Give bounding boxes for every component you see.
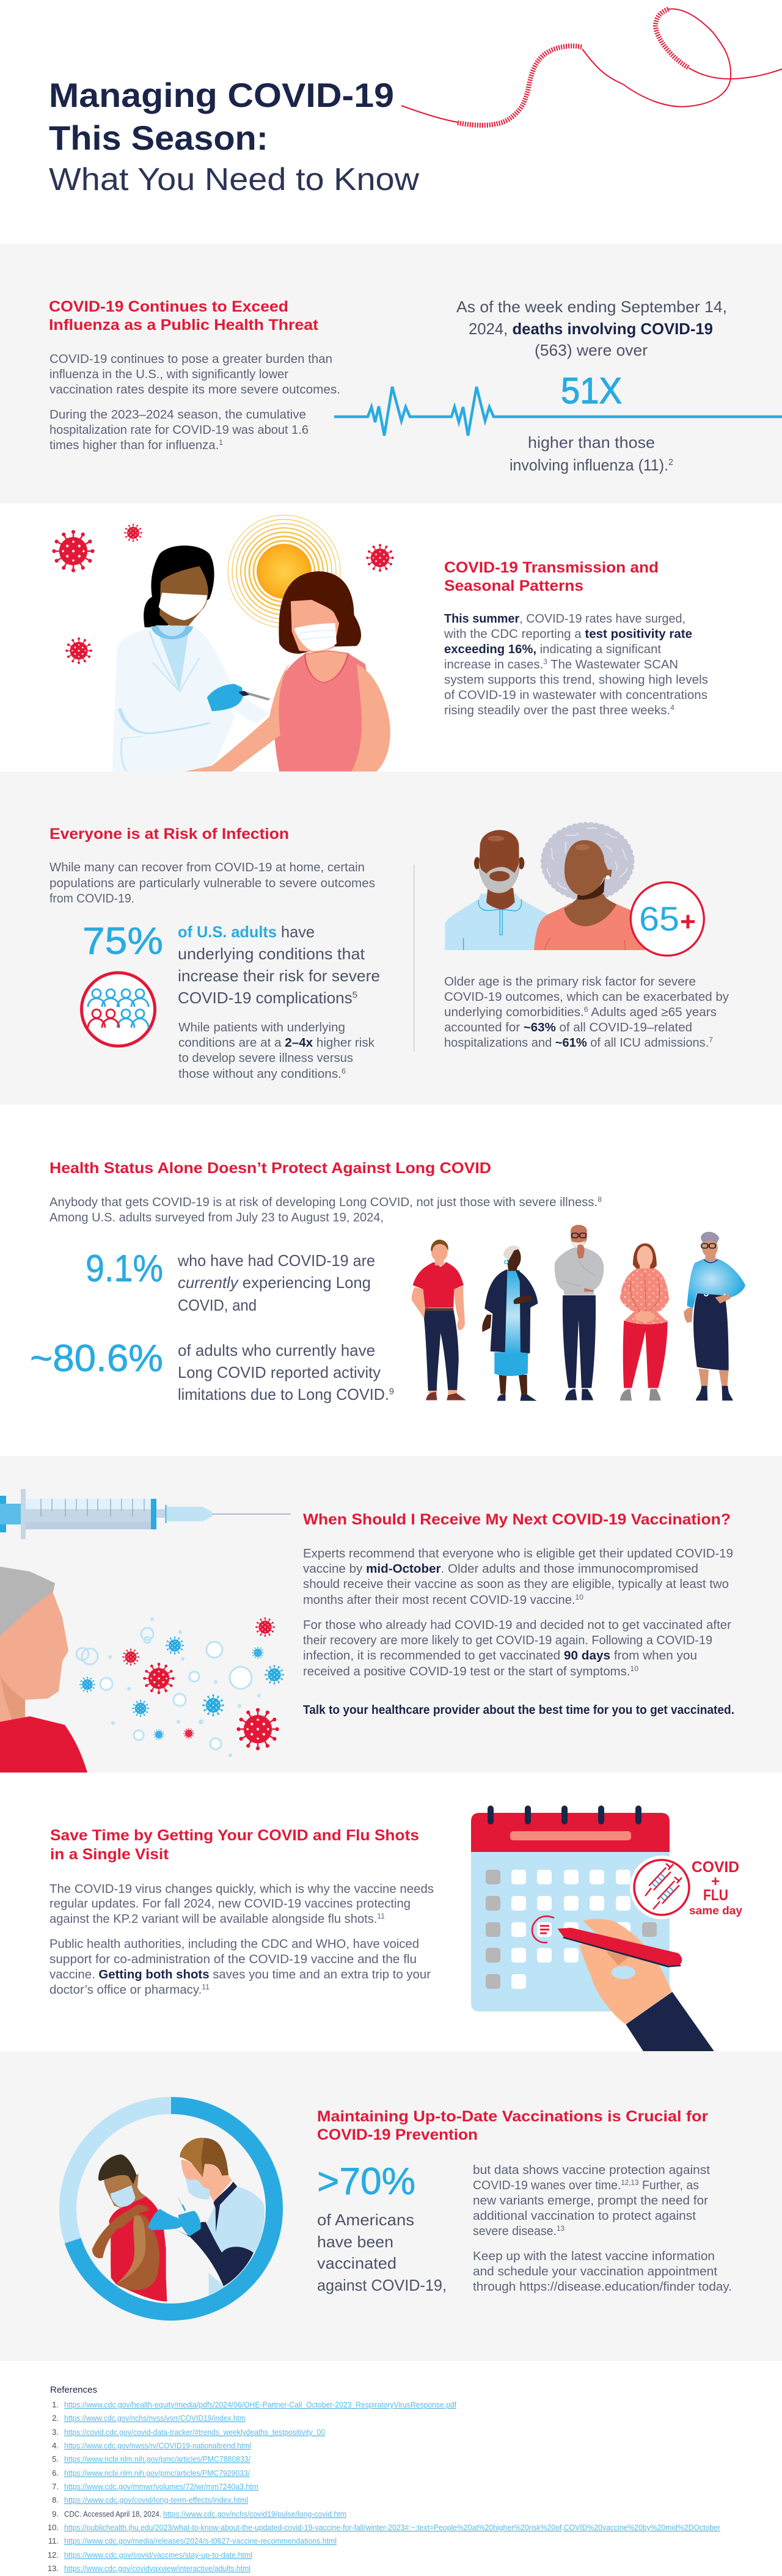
references: 4. [52,2441,59,2450]
callout: COVID + FLU same day: FLU [703,1887,728,1904]
text block: intro [49,1195,602,1224]
icon: people circle [82,973,155,1046]
text block: older age: 6 [584,1005,588,1014]
text block: recovery: received a positive COVID-19 test or the start of symptoms. [303,1665,625,1678]
text block: burden: hospitalization rate for COVID-19 was about 1.6 [49,423,309,437]
text block: waning protection [473,2164,710,2238]
callout: COVID + FLU same day [689,1859,742,1917]
text block: older age [444,975,729,1050]
text block: waning protection: additional vaccination to protect against [473,2209,696,2223]
text block: timing: months after their most recent COVID-19 vaccine. [303,1594,573,1607]
references: 6. [52,2468,59,2478]
text block: burden: times higher than for influenza. [49,439,216,452]
icon label: 65+: + [680,907,696,937]
references: 3. [52,2428,59,2437]
text block: waning protection: Further, as [639,2179,699,2192]
text block: intro: While many can recover from COVID-19 at home, certain [49,861,365,874]
text block: older age: Older age is the primary risk factor for severe [444,975,696,989]
references: 12. [48,2550,59,2560]
stat: >70%: against COVID-19, [317,2276,447,2294]
text block: summer surge: of COVID-19 in wastewater with concentrations [444,689,707,702]
references: https://www.cdc.gov/covid/long-term-effects/index.html [64,2495,248,2505]
icon: sun [228,515,340,628]
text block: 75% description: increase their risk for severe [178,967,380,985]
panel: up-to-date vaccinations [0,2051,782,2361]
text block: summer surge: rising steadily over the past three weeks. [444,704,665,717]
title: What You Need to Know [49,162,419,197]
text block: intro [49,861,375,906]
references: https://www.cdc.gov/nwss/rv/COVID19-nationaltrend.html [64,2441,251,2450]
references: https://www.cdc.gov/health-equity/media/pdfs/2024/06/OHE-Partner-Call_October-2023_RespiratoryVirusResponse.pdf [64,2400,456,2409]
stat: 9.1%: who have had COVID-19 are [177,1251,375,1270]
references: References [50,2385,97,2395]
chart: 70% ring [68,2106,274,2312]
text block: older age: accounted for ~63% of all COVID-19–related [444,1021,692,1034]
text block: burden: 1 [219,438,223,447]
text block: waning protection: severe disease. [473,2225,558,2238]
text block: burden [49,353,340,452]
text block: intro: Anybody that gets COVID-19 is at risk of developing Long COVID, not just those with severe illness. [49,1196,590,1209]
text block: 2-4x risk: 6 [342,1067,346,1075]
title [49,76,419,197]
heading [444,559,659,595]
text block: recovery: 10 [630,1664,638,1673]
stat: deaths 51X: (563) were over [535,341,648,359]
text block: co-administration: 11 [202,1983,210,1991]
text block: 2-4x risk: conditions are at a 2–4x higher risk [178,1036,375,1050]
stat: >70%: >70% [317,2161,415,2203]
panel: long COVID [30,1160,745,1403]
title: This Season: [49,119,268,157]
references: https://www.cdc.gov/covidvaxview/interactive/adults.html [64,2564,250,2573]
heading [49,298,319,334]
person 4 [620,1243,669,1400]
panel: everyone at risk [0,772,782,1105]
illustration: vaccination in ring [92,2138,265,2302]
text block: co-administration: Public health authorities, including the CDC and WHO, have voiced [49,1937,419,1951]
text block: co-administration: vaccine. Getting both shots saves you time and an extra trip to your [49,1968,431,1981]
references: 1. [52,2400,59,2409]
text block: variant updates: 11 [377,1912,385,1920]
person 2 [482,1246,538,1401]
heading: Influenza as a Public Health Threat [49,317,319,334]
text block: recovery [303,1619,731,1678]
text block: variant updates: regular updates. For fall 2024, new COVID-19 vaccines protecting [49,1897,411,1911]
heading: Health Status Alone Doesn’t Protect Against Long COVID [49,1160,491,1177]
illustration: five people [412,1225,745,1401]
heading: COVID-19 Transmission and [444,559,659,576]
text block: 75% description: COVID-19 complications [178,989,352,1007]
text block: waning protection: new variants emerge, prompt the need for [473,2194,708,2208]
icon label: 65+: 65 [639,899,679,938]
text block: burden: vaccination rates despite its more severe outcomes. [49,383,340,397]
text block: variant updates: The COVID-19 virus changes quickly, which is why the vaccine needs [49,1883,434,1896]
references: 8. [52,2495,59,2505]
references: 2. [52,2413,59,2423]
text block: timing: vaccine by mid-October. Older adults and those immunocompromised [303,1562,698,1576]
stat: 80.6%: of adults who currently have [178,1341,375,1359]
icon label: 65+ [639,899,696,938]
stat: >70%: have been [317,2233,393,2251]
text block: burden: COVID-19 continues to pose a greater burden than [49,353,332,366]
illustration: nurse vaccinating patient [112,546,390,772]
stat: deaths 51X: As of the week ending September 14, [456,298,727,316]
text block: waning protection: 13 [557,2224,565,2233]
panel: COVID and flu shots [49,1806,742,2051]
heading: Maintaining Up-to-Date Vaccinations is Crucial for [317,2108,708,2125]
references: https://www.cdc.gov/mmwr/volumes/72/wr/mm7240a3.htm [64,2482,258,2491]
stat: >70% [317,2161,447,2294]
heading: Seasonal Patterns [444,577,583,595]
text block: intro: Among U.S. adults surveyed from July 23 to August 19, 2024, [49,1211,384,1224]
text block: keep up: Keep up with the latest vaccine information [473,2250,715,2263]
text block: summer surge: exceeding 16%, indicating a significant [444,643,661,656]
text block: 75% description: 5 [353,990,357,1000]
references: 11. [48,2536,59,2545]
text block: recovery: For those who already had COVID-19 and decided not to get vaccinated after [303,1619,731,1632]
text block: timing: Experts recommend that everyone who is eligible get their updated COVID-19 [303,1547,733,1561]
icon: syringes circle [630,1856,693,1919]
text block: summer surge: with the CDC reporting a test positivity rate [444,628,692,641]
text block: recovery: infection, it is recommended to get vaccinated 90 days from when you [303,1649,697,1663]
icon: calendar [471,1806,670,2011]
references: https://www.cdc.gov/nchs/nvss/vsrr/COVID19/index.htm [64,2413,246,2423]
callout: talk to provider: Talk to your healthcare provider about the best time for you to get vaccinated. [303,1703,734,1717]
text block: burden: influenza in the U.S., with significantly lower [49,368,288,381]
references: https://www.ncbi.nlm.nih.gov/pmc/articles/PMC7929033/ [64,2468,250,2478]
callout: COVID + FLU same day: + [711,1873,720,1890]
ECG line [334,387,782,436]
stat: 80.6%: Long COVID reported activity [178,1363,381,1381]
stat: >70%: of Americans [317,2211,414,2229]
callout: COVID + FLU same day: COVID [692,1859,739,1876]
text block: summer surge: system supports this trend, showing high levels [444,673,708,687]
references: 10. [48,2523,59,2532]
text block: 75% description: of U.S. adults have [178,923,315,941]
stat: 80.6% [30,1337,394,1403]
panel: public health threat [0,244,782,503]
references: https://covid.cdc.gov/covid-data-tracker/#trends_weeklydeaths_testpositivity_00 [64,2428,325,2437]
heading [317,2108,708,2143]
text block: intro: populations are particularly vulnerable to severe outcomes [49,877,375,890]
text block: waning protection: but data shows vaccine protection against [473,2164,710,2177]
text block: variant updates [49,1883,434,1926]
heading: COVID-19 Continues to Exceed [49,298,288,315]
text block: keep up: through https://disease.education/finder today. [473,2280,732,2294]
text block: 75% description [178,923,380,1007]
text block: recovery: their recovery are more likely to get COVID-19 again. Following a COVID-19 [303,1634,712,1647]
decorative ribbon [401,9,782,125]
text block: 2-4x risk [178,1021,375,1081]
person 5 [684,1232,745,1400]
text block: 75% description: underlying conditions that [178,945,365,963]
illustration: hand with pen [558,1919,714,2051]
text block: keep up: and schedule your vaccination appointment [473,2265,717,2278]
illustration: head exhaling [0,1567,87,1773]
icon: viruses [52,524,394,664]
person 3 [555,1225,604,1400]
person 1 [412,1240,466,1400]
text block: older age: COVID-19 outcomes, which can be exacerbated by [444,990,729,1004]
text block: waning protection: 12,13 [621,2178,639,2187]
text block: burden: During the 2023–2024 season, the cumulative [49,408,306,422]
references: https://publichealth.jhu.edu/2023/what-to-know-about-the-updated-covid-19-vaccine-for-fall/winter-2023#:~:text=People%20at%20higher%20risk%20of,COVID%20vaccine%20by%20mid%2DOctober [64,2523,721,2532]
text block: intro: 8 [597,1195,602,1204]
text block: variant updates: against the KP.2 variant will be available alongside flu shots. [49,1912,375,1926]
stat: 75%: 75% [82,920,163,962]
text block: keep up [473,2250,732,2294]
text block: waning protection: COVID-19 wanes over time. [473,2179,625,2192]
text block: summer surge: 3 [543,657,547,666]
heading: COVID-19 Prevention [317,2126,478,2143]
text block: older age: 7 [709,1036,713,1044]
panel: transmission [52,515,708,772]
icon: syringe [0,1489,291,1539]
text block: older age: Adults aged ≥65 years [588,1006,717,1019]
text block: timing: should receive their vaccine as soon as they are eligible, typically at least two [303,1578,729,1591]
callout: COVID + FLU same day: same day [689,1905,742,1917]
title: Managing COVID-19 [49,76,394,114]
text block: 2-4x risk: those without any conditions. [178,1067,335,1081]
text block: intro: from COVID-19. [49,892,134,906]
references: https://www.ncbi.nlm.nih.gov/pmc/articles/PMC7880833/ [64,2454,250,2464]
heading: When Should I Receive My Next COVID-19 Vaccination? [303,1511,731,1528]
stat: 9.1% [86,1248,375,1314]
text block: timing: 10 [576,1593,583,1601]
stat: 80.6%: limitations due to Long COVID. [178,1385,396,1403]
stat: 9.1%: currently experiencing Long [178,1273,371,1292]
heading [50,1827,419,1863]
stat: deaths 51X: 51X [561,370,622,411]
stat: >70%: vaccinated [317,2254,396,2272]
references: https://www.cdc.gov/media/releases/2024/s-t0627-vaccine-recommendations.html [64,2536,337,2545]
illustration: older couple [445,825,704,956]
text block: summer surge: increase in cases. [444,658,542,671]
stat: deaths 51X: higher than those [528,433,655,452]
text block: co-administration: doctor’s office or pharmacy. [49,1983,199,1997]
references: 13. [48,2564,59,2573]
text block: co-administration: support for co-administration of the COVID-19 vaccine and the flu [49,1953,417,1966]
stat: deaths 51X: 2 [668,457,673,467]
stat: deaths 51X: involving influenza (11). [510,456,675,474]
text block: older age: underlying comorbidities. [444,1006,579,1019]
viruses and droplets [76,1617,284,1757]
stat: 80.6%: 9 [389,1386,394,1397]
panel: when to vaccinate [0,1456,782,1773]
text block: 2-4x risk: to develop severe illness versus [178,1052,353,1065]
text block: co-administration [49,1937,431,1997]
references: 9. [52,2509,59,2519]
heading: in a Single Visit [50,1846,169,1863]
text block: 2-4x risk: While patients with underlying [178,1021,345,1034]
text block: summer surge: The Wastewater SCAN [547,658,678,671]
references: 7. [52,2482,59,2491]
text block: older age: hospitalizations and ~61% of all ICU admissions. [444,1036,709,1050]
references [48,2385,721,2573]
stat: deaths 51X [456,298,727,474]
text block: summer surge [444,612,708,717]
text block: summer surge: 4 [670,703,674,712]
stat: 80.6%: ~80.6% [30,1337,163,1380]
references: CDC. Accessed April 18, 2024. [64,2509,161,2519]
stat: deaths 51X: 2024, deaths involving COVID-19 [469,320,713,338]
heading: Everyone is at Risk of Infection [49,825,289,843]
references: 5. [52,2454,59,2464]
stat: 9.1%: COVID, and [178,1296,257,1314]
stat: 9.1%: 9.1% [86,1248,163,1290]
heading: Save Time by Getting Your COVID and Flu Shots [50,1827,419,1844]
text block: summer surge: This summer, COVID-19 rates have surged, [444,612,685,626]
references: https://www.cdc.gov/nchs/covid19/pulse/long-covid.htm [163,2509,346,2519]
references: https://www.cdc.gov/covid/vaccines/stay-up-to-date.html [64,2550,252,2560]
text block: timing [303,1547,733,1607]
